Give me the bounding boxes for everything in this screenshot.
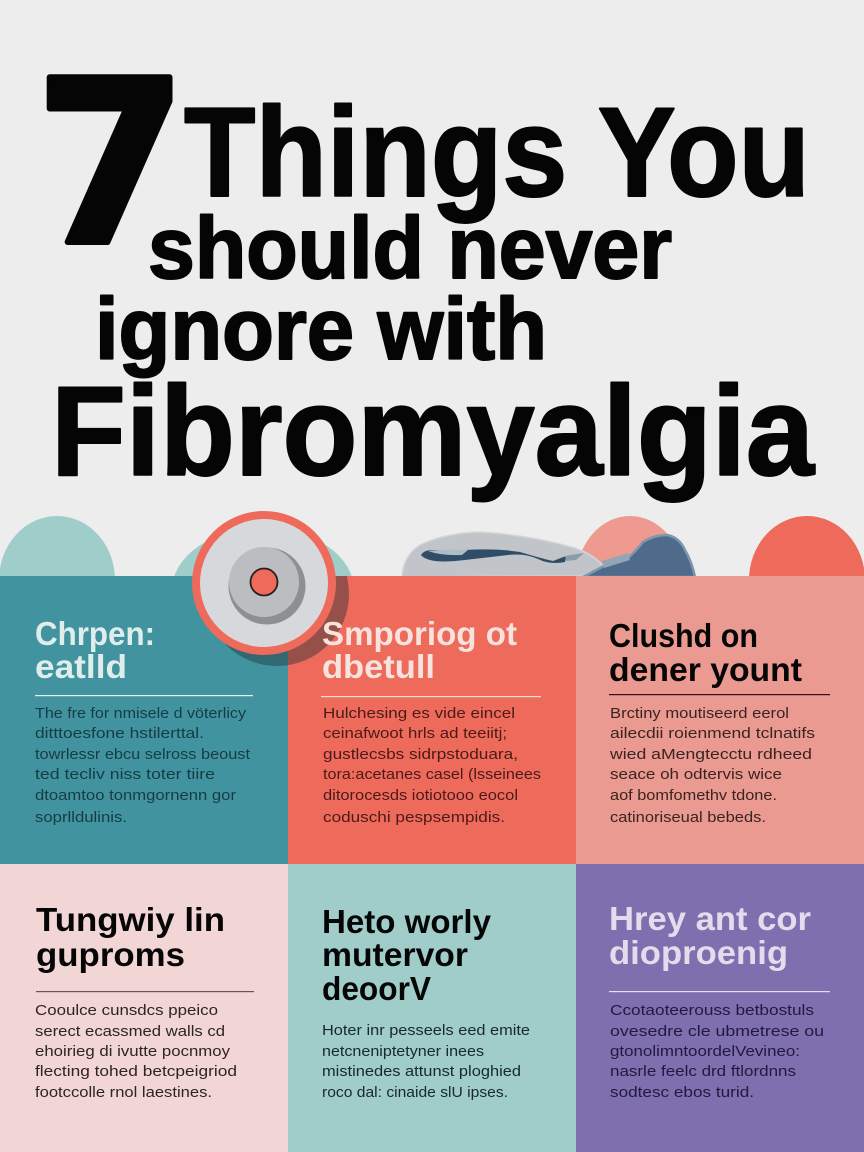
semicircle: salmon bbox=[576, 516, 684, 644]
title line: ignore with: ignore with bbox=[95, 281, 547, 378]
body text: flecting tohed betcpeigriod bbox=[35, 1063, 237, 1080]
body text bbox=[610, 1002, 824, 1101]
panel: light pink bbox=[0, 864, 288, 1152]
body text: footccolle rnol laestines. bbox=[35, 1084, 212, 1101]
body text: roco dal: cinaide slU ipses. bbox=[322, 1084, 508, 1101]
title line: Fibromyalgia: Fibromyalgia bbox=[51, 360, 815, 502]
body text: sodtesc ebos turid. bbox=[610, 1084, 754, 1101]
icon: target disc shadow bbox=[224, 576, 349, 666]
body text bbox=[35, 705, 251, 826]
body text: gustlecsbs sidrpstoduara, bbox=[323, 746, 518, 763]
body text bbox=[322, 1022, 530, 1101]
heading: Hrey ant cor bbox=[609, 900, 811, 937]
body text: tora:acetanes casel (lsseinees bbox=[323, 766, 541, 783]
heading: Tungwiy lin bbox=[36, 901, 225, 938]
semicircle: aqua left bbox=[0, 516, 115, 644]
body text: ted tecliv niss toter tiire bbox=[35, 766, 215, 783]
semicircle: aqua behind target bbox=[172, 528, 354, 652]
panel: purple bbox=[576, 864, 864, 1152]
decorative semicircles and device illustration bbox=[0, 516, 864, 652]
body text: ditorocesds iotiotooo eocol bbox=[323, 787, 518, 804]
body text bbox=[35, 1002, 237, 1101]
body text: serect ecassmed walls cd bbox=[35, 1023, 225, 1040]
panel: coral bbox=[288, 576, 576, 864]
body text: aof bomfomethv tdone. bbox=[610, 787, 777, 804]
heading: dioproenig bbox=[609, 934, 788, 971]
body text: dtoamtoo tonmgornenn gor bbox=[35, 787, 236, 804]
body text: ailecdii roienmend tclnatifs bbox=[610, 725, 815, 742]
panel: salmon bbox=[576, 576, 864, 864]
body text: netcneniptetyner inees bbox=[322, 1043, 484, 1060]
heading bbox=[609, 900, 811, 971]
heading bbox=[322, 903, 492, 1007]
heading bbox=[609, 617, 802, 688]
heading: deoorV bbox=[322, 970, 431, 1007]
title numeral 7: 7 bbox=[35, 33, 187, 296]
body text: Hoter inr pesseels eed emite bbox=[322, 1022, 530, 1039]
icon: grey foot device bbox=[402, 532, 604, 577]
heading bbox=[322, 615, 517, 685]
body text: Ccotaoteerouss betbostuls bbox=[610, 1002, 814, 1019]
title line: should never: should never bbox=[148, 200, 672, 297]
semicircle: coral right bbox=[749, 516, 864, 644]
body text: gtonolimntoordelVevineo: bbox=[610, 1043, 800, 1060]
icon: slate cushion bbox=[583, 535, 695, 577]
title line: Things You: Things You bbox=[184, 81, 810, 223]
body text bbox=[323, 705, 541, 826]
icon: target disc bbox=[192, 511, 336, 655]
body text: nasrle feelc drd ftlordnns bbox=[610, 1063, 796, 1080]
heading: mutervor bbox=[322, 936, 468, 973]
title bbox=[35, 33, 815, 502]
heading bbox=[35, 615, 155, 685]
body text: mistinedes attunst ploghied bbox=[322, 1063, 521, 1080]
body text: Hulchesing es vide eincel bbox=[323, 705, 515, 722]
body text: ceinafwoot hrls ad teeiitj; bbox=[323, 725, 507, 742]
body text: wied aMengtecctu rdheed bbox=[609, 746, 812, 763]
body text: ehoirieg di ivutte pocnmoy bbox=[35, 1043, 231, 1060]
body text: towrlessr ebcu selross beoust bbox=[35, 746, 251, 763]
body text bbox=[609, 705, 815, 826]
body text: Cooulce cunsdcs ppeico bbox=[35, 1002, 218, 1019]
body text: The fre for nmisele d vöterlicy bbox=[35, 705, 247, 722]
heading: guproms bbox=[36, 936, 185, 973]
heading: Clushd on bbox=[609, 617, 758, 654]
heading: dener yount bbox=[609, 651, 802, 688]
panel: aqua bbox=[288, 864, 576, 1152]
heading bbox=[36, 901, 225, 973]
body text: catinoriseual bebeds. bbox=[610, 809, 766, 826]
heading: Heto worly bbox=[322, 903, 492, 940]
heading: Chrpen: bbox=[35, 615, 155, 652]
panel text: coral column bbox=[321, 615, 541, 826]
body text: ditttoesfone hstilerttal. bbox=[35, 725, 204, 742]
body text: Brctiny moutiseerd eerol bbox=[610, 705, 789, 722]
body text: seace oh odtervis wice bbox=[610, 766, 782, 783]
body text: coduschi pespsempidis. bbox=[323, 809, 505, 826]
body text: ovesedre cle ubmetrese ou bbox=[610, 1023, 824, 1040]
panel: teal bbox=[0, 576, 288, 864]
body text: soprlldulinis. bbox=[35, 809, 127, 826]
heading: eatlld bbox=[35, 648, 127, 685]
heading: Smporiog ot bbox=[322, 615, 517, 652]
heading: dbetull bbox=[322, 648, 435, 685]
